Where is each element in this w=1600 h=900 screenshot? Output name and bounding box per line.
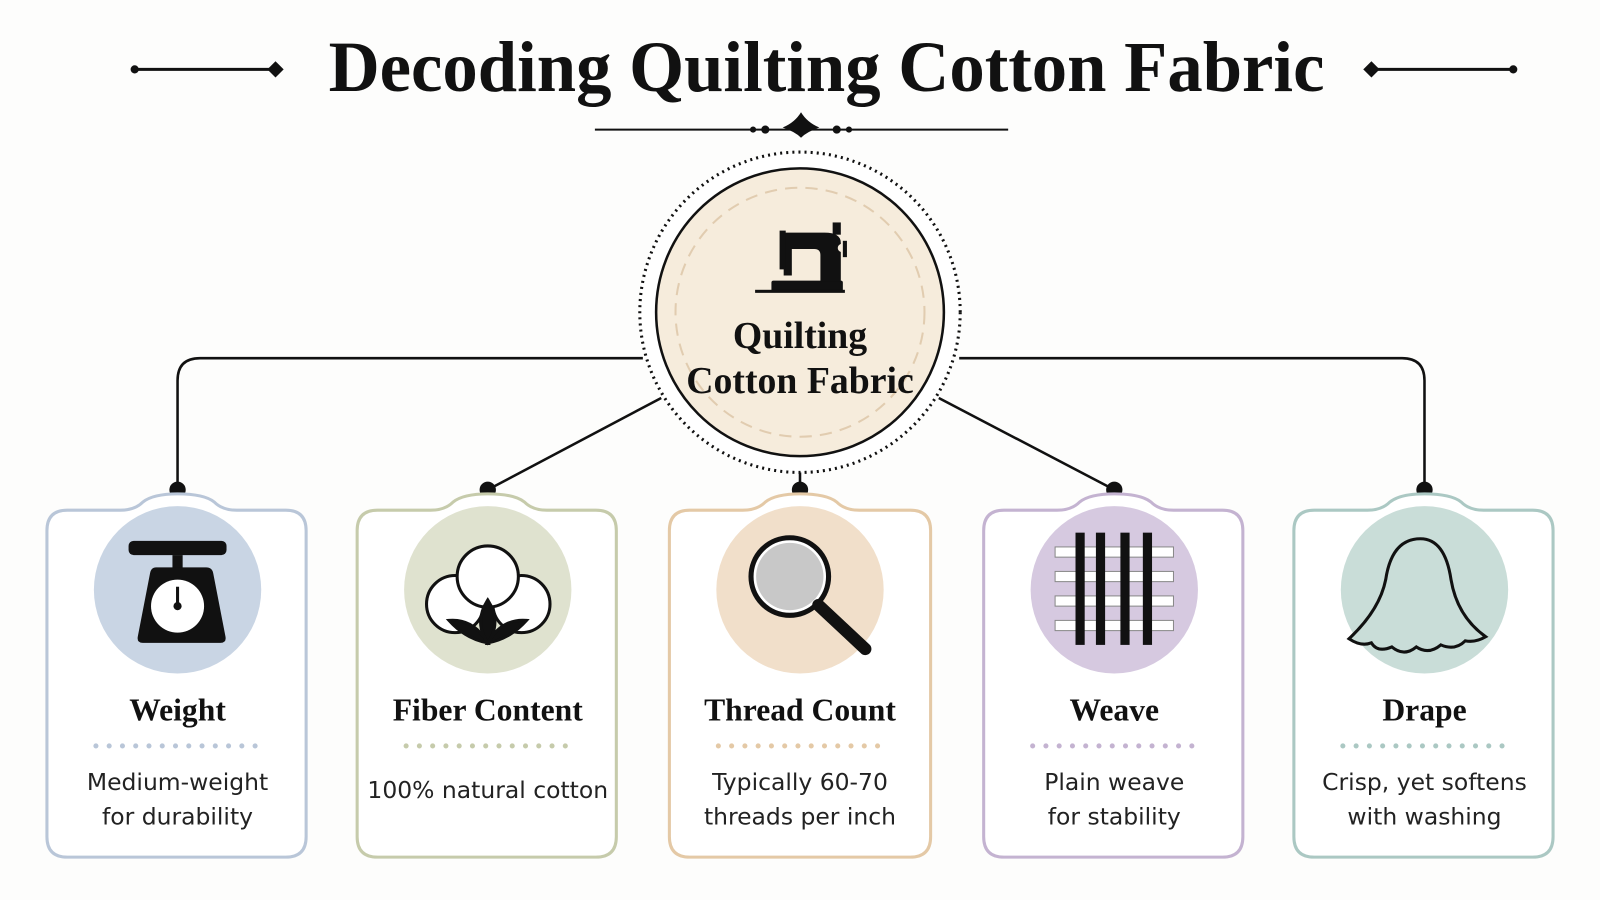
icon: cotton bbox=[427, 546, 550, 643]
panel: drape: Crisp, yet softens bbox=[1322, 768, 1527, 796]
icon: magnifier bbox=[751, 538, 865, 649]
panel: weave bbox=[984, 494, 1243, 857]
panel: weight: for durability bbox=[102, 802, 253, 830]
title bbox=[131, 26, 1517, 138]
panel: weave: Plain weave bbox=[1044, 768, 1184, 796]
panel: thread count: threads per inch bbox=[704, 802, 896, 830]
center hub bbox=[640, 152, 960, 472]
panel: weight: Weight bbox=[129, 692, 226, 727]
connectors bbox=[178, 358, 1424, 490]
panel: fiber content bbox=[357, 494, 616, 857]
center hub: Quilting bbox=[733, 315, 867, 357]
panel: weave: Weave bbox=[1069, 692, 1159, 727]
panel: weave: for stability bbox=[1048, 802, 1181, 830]
panel: fiber content: Fiber Content bbox=[393, 692, 583, 727]
icon: scale bbox=[129, 541, 227, 643]
panel: weight bbox=[47, 494, 306, 857]
panel: drape: Drape bbox=[1382, 692, 1467, 727]
panel: fiber content: 100% natural cotton bbox=[367, 776, 608, 804]
title: Decoding Quilting Cotton Fabric bbox=[329, 26, 1324, 107]
panel: weight: Medium-weight bbox=[87, 768, 268, 796]
panel: thread count bbox=[669, 494, 931, 857]
panel: thread count: Thread Count bbox=[704, 692, 896, 727]
panel: thread count: Typically 60-70 bbox=[711, 768, 888, 796]
icon: weave grid bbox=[1055, 533, 1173, 645]
icon: sewing machine bbox=[755, 222, 847, 293]
icon: cloth bbox=[1349, 539, 1486, 652]
panel: drape: with washing bbox=[1347, 802, 1502, 830]
center hub: Cotton Fabric bbox=[686, 360, 914, 402]
panel: drape bbox=[1294, 494, 1553, 857]
